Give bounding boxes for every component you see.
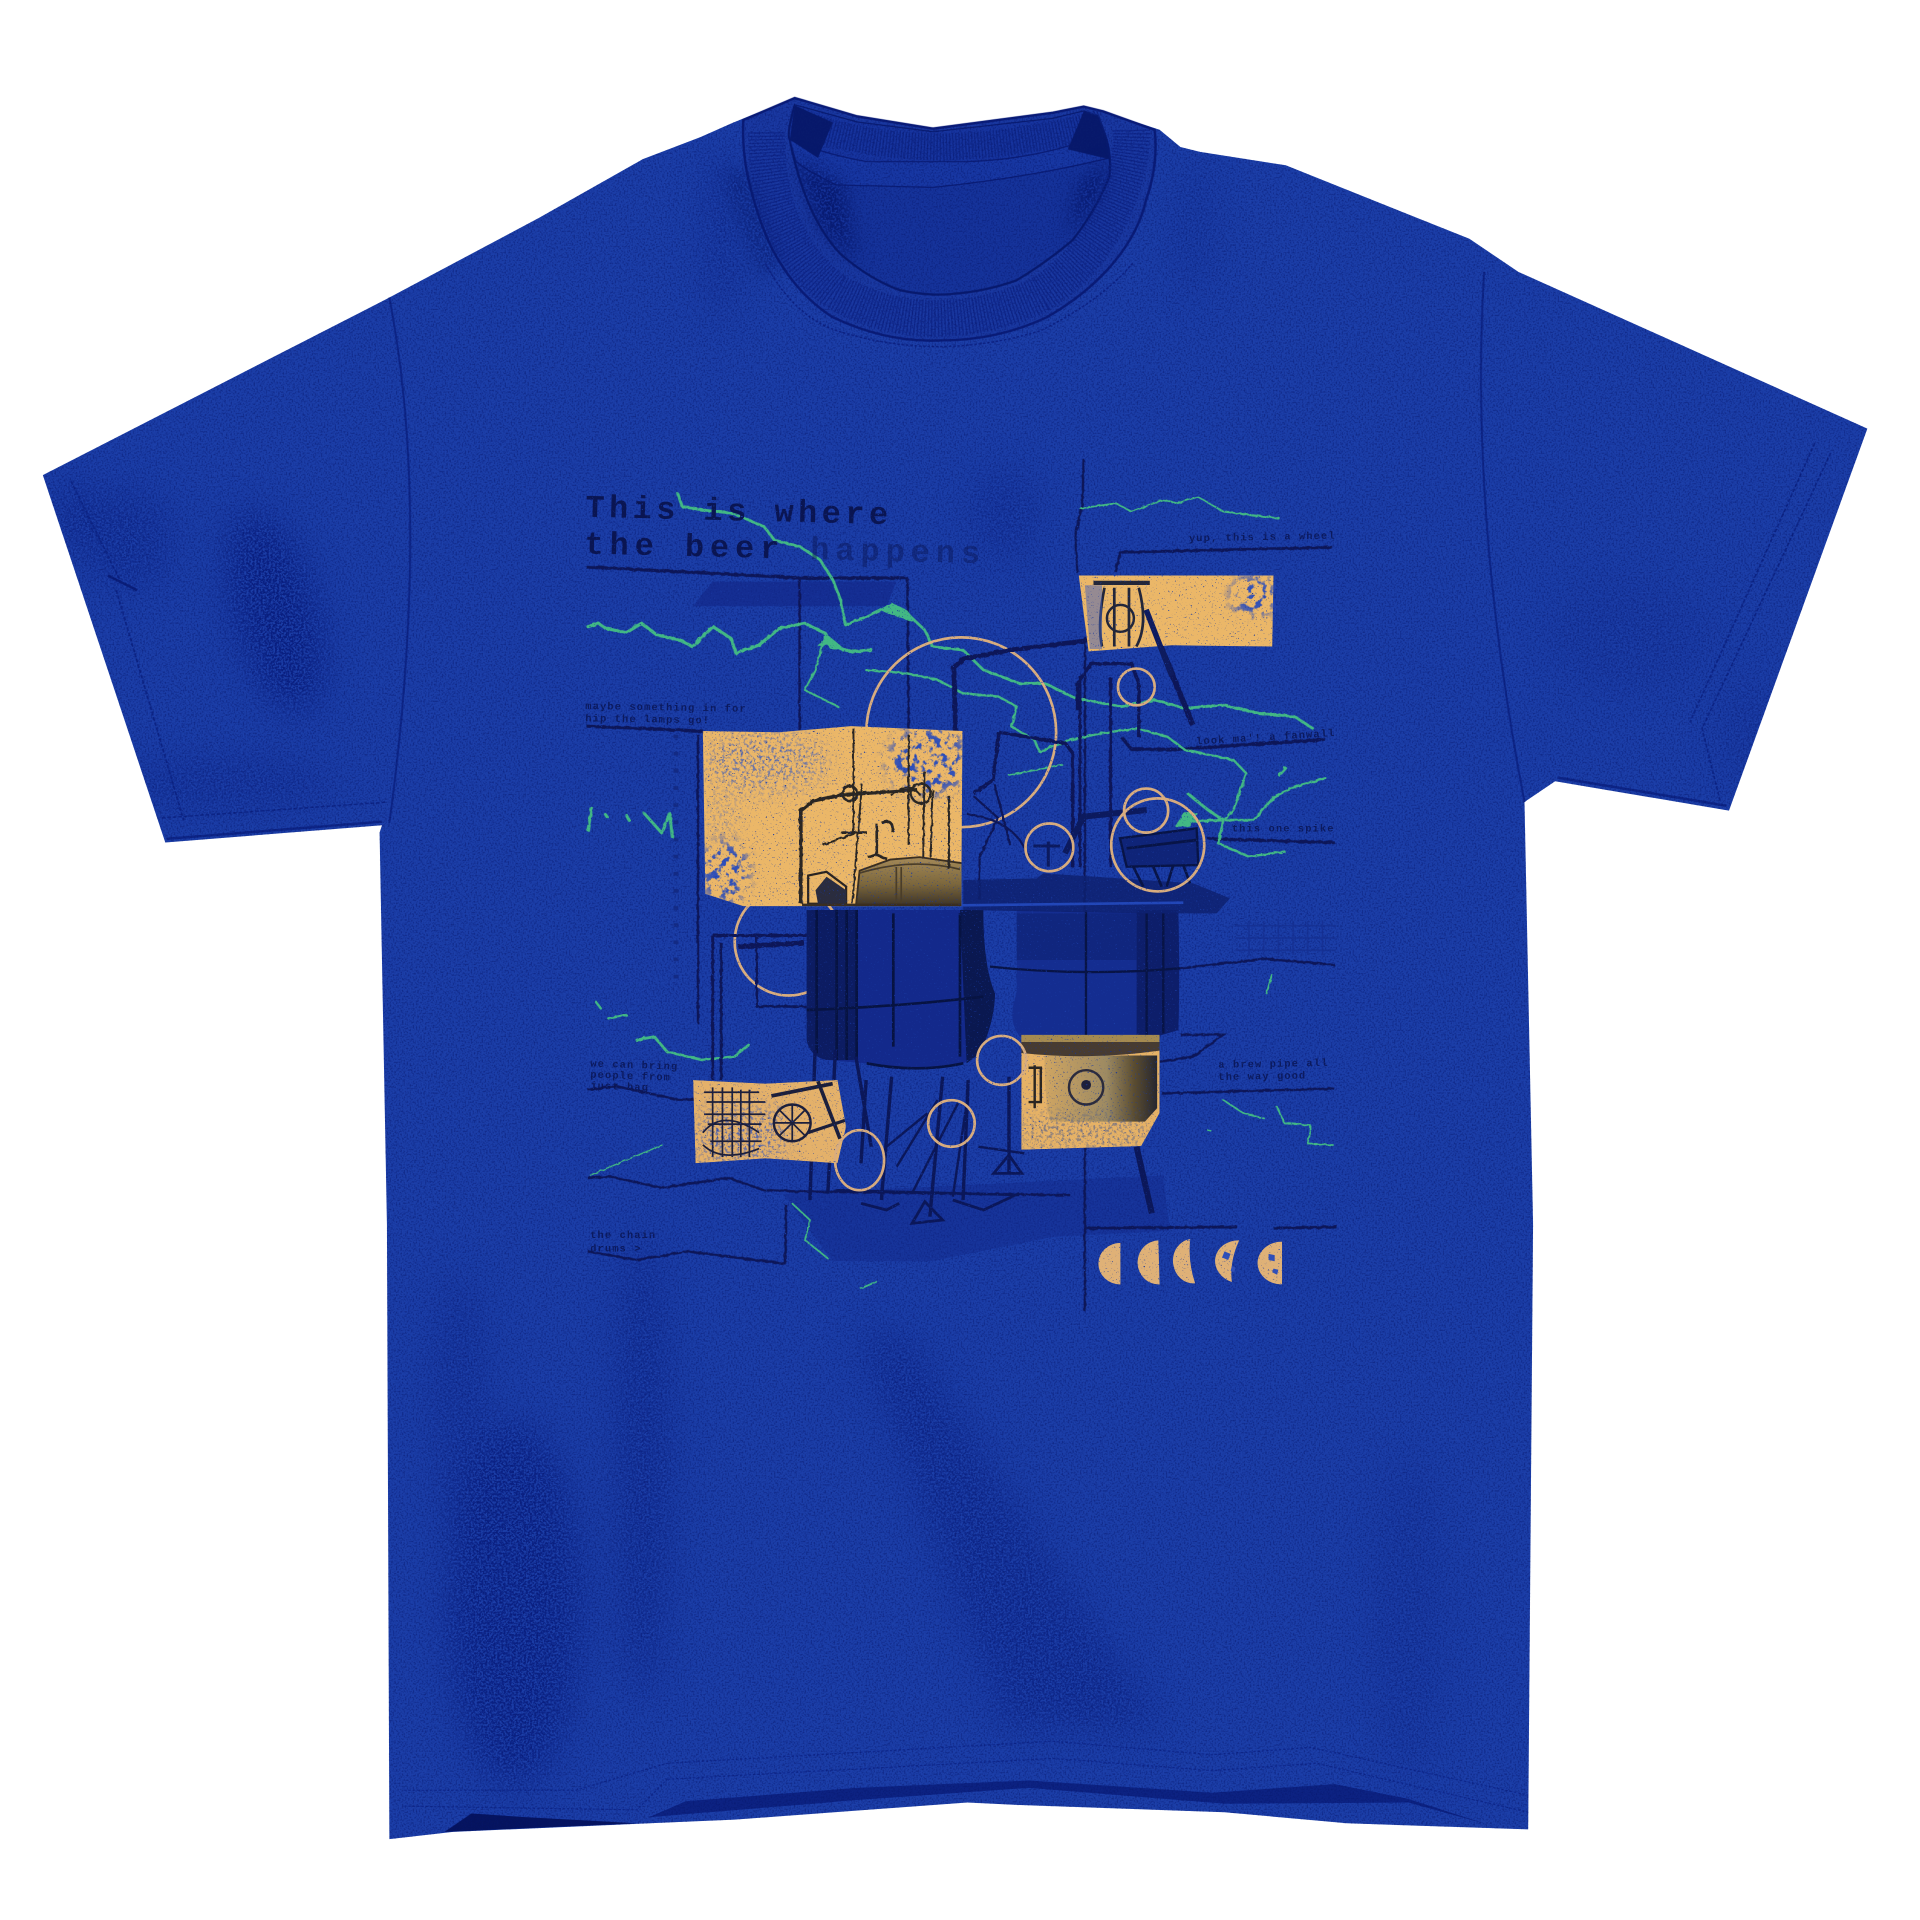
fabric shading	[54, 147, 1783, 1788]
collar dark corners	[790, 105, 833, 158]
moon phases	[1098, 1239, 1282, 1284]
door hinges	[1029, 1065, 1041, 1108]
title	[584, 491, 987, 573]
stove panel	[1021, 1035, 1160, 1150]
hatched patch	[693, 582, 896, 606]
circle: wagon	[1111, 798, 1204, 891]
table line	[960, 903, 1183, 905]
caption: hip the lamps: hip the lamps go!	[585, 713, 710, 727]
back neck tape	[790, 133, 1109, 187]
caption: spike: this one spike	[1232, 823, 1335, 835]
stove top band	[1021, 1041, 1160, 1056]
left vessel	[807, 910, 995, 1068]
ink shadow below machinery	[784, 1176, 1169, 1261]
brewing machinery in blue	[713, 610, 1230, 1223]
moon 5	[1258, 1242, 1282, 1284]
title line 2: the beer happens	[584, 527, 986, 573]
green lightning veins	[588, 493, 1333, 1288]
caption: fanwall: look ma'! a fanwall	[1196, 728, 1336, 748]
vessel legs	[810, 1050, 1152, 1223]
small captions: just bag	[590, 1081, 649, 1095]
machine sketch	[703, 1081, 845, 1157]
moon 1	[1098, 1243, 1120, 1284]
big yellow panel	[700, 726, 970, 907]
circle: pipe joint	[977, 1036, 1026, 1085]
caption: chain: the chain	[590, 1230, 656, 1242]
black rule lines	[587, 459, 1337, 1311]
left sleeve seams	[71, 298, 410, 839]
kettle on panel	[856, 857, 962, 906]
circle: crank	[1026, 823, 1073, 871]
small hopper	[808, 872, 846, 904]
hem inner fold	[444, 1813, 637, 1832]
weathered blue blotches	[700, 727, 970, 907]
left circle	[735, 888, 842, 996]
panel pipes	[801, 729, 949, 904]
circle: lever	[835, 1130, 884, 1190]
small captions: drums >	[590, 1243, 642, 1255]
title line 1: This is where	[585, 491, 893, 534]
valve	[1093, 583, 1150, 647]
circle: wagon top	[1124, 789, 1168, 833]
caption: brew pipe: a brew pipe all	[1218, 1058, 1328, 1072]
right vessel	[1012, 910, 1179, 1037]
wagon	[1120, 828, 1198, 867]
collar	[722, 98, 1156, 347]
caption: maybe something: maybe something in for	[585, 701, 747, 716]
seal	[1069, 1070, 1103, 1104]
hem stitching	[404, 1741, 1528, 1812]
pipes and columns	[713, 610, 1193, 1080]
collar ribbing	[743, 98, 1156, 341]
caption: wheel: yup, this is a wheel	[1189, 531, 1336, 545]
valve panel	[1079, 576, 1277, 676]
small captions: the way good	[1218, 1070, 1306, 1084]
large circle	[866, 637, 1056, 827]
small circles	[835, 669, 1204, 1190]
small captions: people from	[590, 1070, 671, 1084]
scale ticks	[674, 735, 678, 980]
caption: people: we can bring	[590, 1059, 678, 1074]
right kettle top	[963, 873, 1230, 913]
faint grid	[1236, 921, 1336, 955]
circles behind panels	[735, 637, 1056, 996]
moon 4	[1215, 1240, 1239, 1282]
vessels	[807, 810, 1230, 1068]
back neck rib	[790, 105, 1104, 162]
stove door	[1044, 1056, 1157, 1122]
circle: legs	[928, 1100, 975, 1147]
circle: gauge	[1118, 669, 1155, 705]
small captions	[585, 531, 1336, 1255]
small machine panel	[693, 1080, 846, 1163]
moon 3	[1173, 1239, 1195, 1283]
right sleeve seams	[1481, 272, 1831, 806]
moon 2	[1138, 1240, 1160, 1284]
collar rib lines	[767, 130, 1131, 319]
crank arm	[1065, 810, 1147, 853]
collar inner	[789, 105, 1110, 295]
print artwork	[584, 459, 1337, 1311]
